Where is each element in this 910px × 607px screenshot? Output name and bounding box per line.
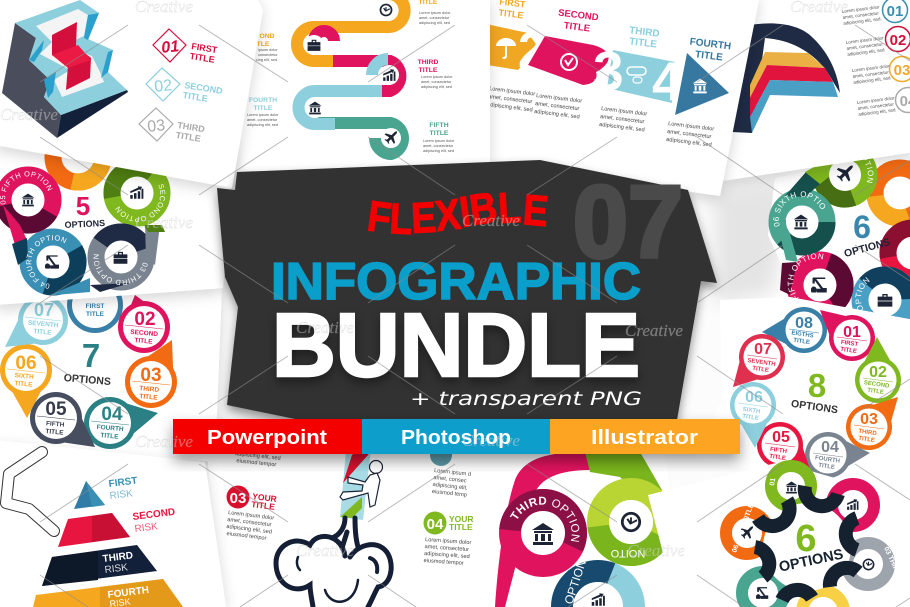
step titles: TITLE (629, 36, 658, 51)
snake captions (247, 11, 455, 153)
watermarks: Creative (296, 318, 354, 337)
title: star 6 options (778, 518, 845, 576)
ring labels: 06 SIXTH TITLE (731, 502, 756, 554)
pin 05 (757, 422, 812, 475)
item 04: 04 (427, 516, 444, 533)
segment: powerpoint: Powerpoint (207, 427, 327, 449)
pyramid (33, 481, 183, 607)
numbered list: adipiscing elit, sed (853, 75, 891, 85)
numbered list: Lorem ipsum dolor (852, 63, 890, 73)
ring labels (731, 477, 910, 597)
pin 04: FOURTH (96, 424, 124, 433)
pin 02: SECOND (130, 329, 158, 338)
step 3 puzzle: 3 (593, 40, 624, 102)
numbered list: Lorem ipsum dolor (842, 4, 880, 14)
pyramid labels: FOURTH (107, 585, 150, 601)
item 03: amet, consectetur (227, 517, 272, 528)
panel: 6 options star (648, 462, 910, 607)
ring labels: 04 FOURTH OPTION (26, 235, 67, 289)
title: 6 options: OPTIONS (843, 236, 892, 260)
item above band: eiusmod temp (432, 489, 467, 499)
step captions: amet, consectetur (535, 101, 580, 112)
step captions: adipiscing elit, sed (487, 102, 533, 113)
pin 07 (733, 334, 785, 387)
item above band (234, 444, 471, 499)
pin 04: TITLE (100, 432, 119, 441)
step 3 puzzle: 4 (652, 50, 683, 112)
heading: infographic: INFOGRAPHIC (271, 253, 641, 311)
pin 06: 06 (15, 353, 37, 374)
seated figure (340, 460, 382, 507)
snake captions: adipiscing elit, sed (423, 149, 454, 153)
pin 03: TITLE (858, 436, 875, 444)
step captions: Lorem ipsum dolor (536, 93, 582, 105)
star interior white (763, 503, 851, 591)
ring icons (736, 477, 879, 607)
item 03: eiusmod tempor (226, 531, 267, 542)
pin 04 (805, 432, 870, 478)
step captions: adipiscing elit, sed (599, 122, 645, 133)
watermarks: Creative (296, 541, 354, 560)
pin 06: SIXTH (742, 407, 761, 415)
pin 02: TITLE (867, 388, 884, 396)
step 1 puzzle (486, 22, 546, 78)
snake titles: TITLE (254, 105, 273, 112)
pyramid labels: THIRD (102, 550, 134, 565)
pin 08 (762, 307, 827, 353)
pin 01: 01 (843, 324, 861, 341)
step captions: adipiscing elit, sed (666, 137, 712, 148)
snake captions: consectetur (258, 53, 278, 57)
item above band: Lorem ipsum d (434, 468, 471, 478)
numbered list: adipiscing elit, sed (847, 47, 885, 57)
item 03: YOUR (252, 491, 277, 504)
pin 02 (118, 295, 170, 353)
snake captions: adipiscing elit, sed (247, 123, 278, 127)
item 03: 03 (230, 490, 246, 507)
pin 01: TITLE (86, 311, 105, 318)
pin 06: 06 (745, 389, 763, 406)
numbered list: amet, consectetur (846, 41, 884, 51)
snake captions: amet, consectetur (421, 80, 452, 84)
item 04: Lorem ipsum dolor (425, 537, 471, 546)
ring labels: 03 THIRD TITLE (882, 546, 910, 597)
step titles: THIRD (628, 25, 660, 40)
panel: 5 options rings (0, 153, 239, 314)
central dark house banner (217, 160, 717, 420)
heading: flexible (365, 183, 550, 244)
title: 8 options: 8 (808, 367, 826, 404)
pin 04: FOURTH (815, 455, 840, 465)
ring: blue option: OPTION (562, 558, 589, 606)
step 3 puzzle (593, 40, 683, 112)
pin 05: FIFTH (770, 447, 787, 455)
pin 06: SIXTH (14, 372, 34, 381)
panel: 7 options pins (0, 277, 222, 462)
snake captions: Lorem ipsum dolor (423, 139, 454, 143)
ring labels: OPTION (864, 159, 874, 184)
ring icons (786, 159, 910, 316)
snake captions: cing elit, sed (256, 58, 277, 62)
pin 07: SEVENTH (28, 320, 59, 329)
step captions: amet, consectetur (667, 129, 712, 140)
snake titles: OND (259, 33, 275, 40)
pin 01 (820, 310, 875, 361)
item above band: adipiscing elit, sed (235, 451, 281, 462)
pin 08: EIGTHS (791, 330, 814, 339)
ring labels: 01 (769, 477, 777, 486)
title: 7 options: 7 (82, 337, 100, 374)
cloud (276, 518, 391, 607)
pin 02: 02 (869, 364, 887, 381)
ring labels: SECOND OPTION (115, 184, 166, 222)
title: 7 options: OPTIONS (63, 372, 111, 388)
step 1 puzzle: 2 (518, 22, 546, 78)
step captions: adipiscing elit, sed (534, 109, 580, 120)
ring: clock (587, 478, 675, 566)
pin 06: TITLE (742, 414, 759, 422)
item 03: TITLE (251, 499, 276, 512)
snake titles: FIFTH (429, 122, 449, 129)
list items: TITLE (175, 130, 201, 144)
step titles: TITLE (498, 7, 524, 20)
numbered list: 02 (890, 32, 906, 49)
segment: photoshop (362, 419, 550, 454)
ring connectors (3, 205, 165, 295)
watermarks: Creative (135, 213, 193, 232)
watermarks: Creative (462, 211, 520, 230)
ribbon arch (495, 452, 662, 607)
panel: 8 options pins (695, 297, 910, 505)
heading: flexible: B (467, 183, 500, 235)
list items: 01 (161, 38, 180, 57)
snake captions: amet, consectetur (247, 118, 278, 122)
pin 04: 04 (101, 404, 123, 425)
step captions: amet, consectetur (600, 114, 645, 125)
pin 03 (125, 340, 177, 408)
pin 03: THIRD (139, 385, 159, 394)
pyramid labels: FIRST (108, 476, 138, 490)
pin 07: SEVENTH (747, 358, 776, 368)
ring labels: OPTION (855, 277, 870, 310)
heading: flexible: F (365, 192, 394, 243)
title: 8 options (790, 367, 839, 416)
title: star 6 options: 6 (795, 518, 817, 560)
numbered list: amet, consectetur (852, 69, 890, 79)
step titles: SECOND (557, 8, 599, 23)
pin 08: 08 (795, 315, 813, 332)
pin 05 (30, 392, 95, 447)
snake captions: Lorem ipsum dolor (247, 113, 278, 117)
watermarks: Creative (135, 432, 193, 451)
snake captions: amet, consectetur (423, 144, 454, 148)
pin 03: 03 (860, 411, 878, 428)
snake titles: TLE (257, 41, 270, 48)
title: 8 options: OPTIONS (790, 398, 839, 416)
snake icons (304, 0, 401, 148)
snake captions: Lorem ipsum dolor (419, 11, 450, 15)
snake titles (249, 0, 449, 137)
item 04: TITLE (449, 522, 473, 532)
arm outline (6, 452, 54, 531)
ring labels: FIFTH OPTION (788, 253, 824, 298)
pin 02: 02 (134, 309, 156, 330)
item 04: YOUR (449, 514, 474, 524)
ring: third option (499, 489, 587, 577)
pin 02 (855, 337, 901, 403)
heading: bundle: BUNDLE (272, 296, 640, 396)
color band (173, 419, 740, 454)
rings (777, 144, 910, 335)
ring connectors (777, 158, 840, 295)
pin 01: FIRST (840, 340, 859, 348)
list items: SECOND (184, 80, 223, 96)
step captions: Lorem ipsum dolor (601, 106, 647, 118)
pin 05: 05 (45, 399, 67, 420)
segment: photoshop: Photoshop (401, 427, 511, 449)
pin 02: SECOND (863, 380, 890, 390)
subtitle: + transparent PNG (410, 388, 642, 410)
heading: flexible: I (457, 188, 474, 237)
numbered list: amet, consectetur (857, 101, 895, 111)
item 03: adipiscing elit, sed (226, 524, 272, 535)
pin 01 (67, 277, 123, 333)
numbered list: adipiscing elit, sed (858, 107, 896, 117)
pin 04 (84, 397, 158, 449)
pin 05: 05 (772, 429, 790, 446)
step titles: TITLE (694, 49, 724, 64)
number 07: 07 (573, 165, 683, 279)
numbered list: 03 (894, 62, 910, 79)
numbered list: 01 (887, 3, 903, 20)
pin 05: TITLE (769, 454, 786, 462)
list items: 02 (154, 77, 173, 96)
item above band: eiusmod tempor (236, 458, 277, 468)
item 04 (423, 512, 474, 567)
step titles (498, 0, 732, 64)
ring labels: 03 THIRD OPTION (93, 254, 148, 286)
sail 3D chart (732, 23, 840, 133)
step titles: TITLE (563, 20, 591, 34)
list items (139, 29, 224, 144)
segment: illustrator (550, 419, 740, 454)
pin 07: TITLE (752, 366, 769, 374)
panel: top right numbered sail (722, 0, 910, 181)
heading: flexible: E (521, 186, 550, 236)
list items: TITLE (189, 51, 215, 65)
ring icons (12, 141, 153, 278)
pin 05: FIFTH (46, 420, 65, 429)
pyramid labels (102, 476, 176, 607)
pyramid labels: RISK (104, 562, 129, 576)
step captions (487, 86, 715, 149)
striped column (340, 440, 372, 520)
navy connectors (755, 486, 858, 600)
pin 07 (5, 295, 68, 347)
ring: blue option (562, 558, 634, 607)
pin 03 (846, 397, 898, 450)
pin 02: TITLE (134, 337, 153, 346)
segment: illustrator: Illustrator (591, 427, 698, 449)
pin 06: TITLE (14, 380, 33, 389)
watermarks: Creative (627, 541, 685, 560)
pin 04: TITLE (818, 463, 835, 471)
heading: flexible: X (433, 190, 463, 241)
title: 6 options: 6 (853, 209, 871, 245)
item above band: amet, consec (433, 475, 467, 484)
ring labels (0, 171, 166, 289)
pin 04: 04 (821, 439, 839, 456)
snake captions: adipiscing elit, sed (421, 85, 452, 89)
snake captions: amet, consectetur (419, 16, 450, 20)
colored rings (726, 466, 889, 607)
snake titles: THIRD (418, 59, 438, 66)
numbered list: Lorem ipsum dolor (857, 95, 895, 105)
pin 08: TITLE (793, 338, 810, 346)
snake ribbon (297, 0, 405, 154)
numbered list: adipiscing elit, sed (843, 16, 881, 26)
list items: TITLE (182, 90, 208, 104)
snake captions: Lorem ipsum dolor (421, 75, 452, 79)
item above band: adipiscing elit, (432, 482, 468, 492)
list items: THIRD (177, 120, 205, 134)
title: 7 options (63, 337, 111, 388)
panel: puzzle steps (480, 0, 760, 196)
watermarks: Creative (462, 431, 520, 450)
pin 07: TITLE (33, 328, 52, 337)
title: 5 options: OPTIONS (64, 218, 105, 230)
snake titles: TITLE (419, 67, 438, 74)
segment: powerpoint (173, 419, 362, 454)
title: 5 options: 5 (76, 191, 90, 221)
step captions: Lorem ipsum dolor (668, 121, 714, 133)
step captions: amet, consectetur (488, 94, 533, 105)
watermarks: Creative (0, 105, 58, 124)
ring: third option: THIRD OPTION (510, 496, 580, 542)
watermarks: Creative (625, 321, 683, 340)
pin 06 (0, 344, 52, 418)
pin 03: TITLE (139, 393, 158, 402)
heading: flexible: L (497, 183, 522, 233)
snake titles: FOURTH (249, 97, 277, 104)
panel: bottom left pyramid (0, 440, 226, 607)
list items: 03 (147, 117, 166, 136)
pin 01: FIRST (86, 303, 104, 310)
title: 6 options (843, 209, 892, 260)
title: star 6 options: OPTIONS (778, 546, 845, 576)
panel: snake timeline (235, 0, 490, 172)
step 2 puzzle (528, 36, 609, 85)
step titles: FOURTH (689, 37, 732, 53)
heading: flexible: L (388, 195, 414, 244)
title: 5 options (64, 191, 105, 230)
heading: flexible: E (410, 193, 437, 243)
panel: first steps isometric (0, 0, 263, 188)
numbered list (842, 0, 910, 117)
pyramid labels: SECOND (132, 507, 176, 523)
rings (0, 132, 166, 296)
item 04: eiusmod tempor (423, 558, 464, 567)
item 04: amet, consectetur (424, 544, 469, 553)
ring: clock: NOITO (610, 547, 645, 559)
snake captions: ipsum dolor (258, 48, 278, 52)
item 03: Lorem ipsum dolor (228, 510, 274, 522)
step captions: Lorem ipsum dolor (489, 86, 535, 98)
numbered list: amet, consectetur (842, 10, 880, 20)
pin 03: 03 (140, 365, 162, 386)
panel: 6 options rings (768, 158, 910, 320)
pin 01: TITLE (840, 347, 857, 355)
panel: ribbon options (495, 454, 663, 607)
snake titles: TITLE (430, 130, 449, 137)
numbered list: Lorem ipsum dolor (846, 35, 884, 45)
pin 05: TITLE (45, 428, 64, 437)
step 4 arrow (675, 53, 729, 115)
pin 03: THIRD (858, 429, 878, 437)
pin 06 (730, 382, 776, 448)
pin 07: 07 (754, 341, 772, 358)
pyramid labels: RISK (109, 488, 134, 502)
item 04: adipiscing elit, sed (424, 551, 470, 560)
item 03 (225, 486, 277, 542)
pyramid labels: RISK (134, 521, 159, 535)
ring labels (773, 159, 874, 310)
snake captions: adipiscing elit, sed (419, 21, 450, 25)
panel: bottom middle man on cloud (206, 440, 510, 607)
isometric S shape (2, 0, 128, 138)
list items: FIRST (191, 41, 218, 55)
pin 07: 07 (34, 300, 54, 320)
